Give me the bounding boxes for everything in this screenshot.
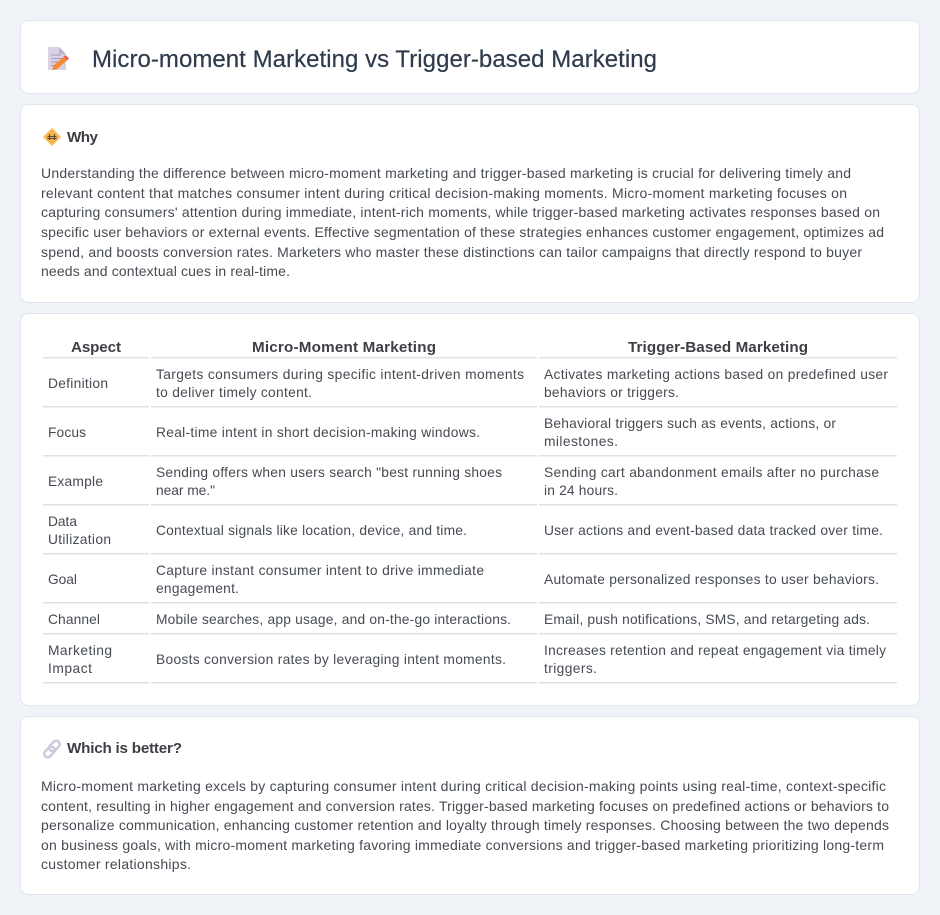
table row: channel	[43, 612, 897, 634]
heading: why: Why	[67, 129, 99, 146]
table row: goal: Goal	[48, 572, 77, 587]
icon: document with pencil	[48, 47, 69, 70]
table row: marketing impact: Marketing	[48, 643, 112, 658]
table row: data utilization: Utilization	[48, 532, 111, 547]
icon: warning diamond	[44, 128, 60, 146]
table header row: Micro-Moment Marketing	[252, 339, 436, 356]
text block: why paragraph: needs and contextual cues in real-time.	[41, 263, 290, 279]
text block: which is better paragraph: customer relationships.	[41, 856, 191, 872]
panel: title header	[20, 20, 920, 94]
table row: example: in 24 hours.	[544, 483, 618, 498]
table row: data utilization	[43, 514, 897, 554]
table row: example: Example	[48, 474, 103, 489]
table row: marketing impact	[43, 643, 897, 684]
table row: goal: Capture instant consumer intent to drive immediate	[156, 563, 484, 578]
table row: definition: Activates marketing actions based on predefined user	[544, 367, 888, 382]
table row: channel: Mobile searches, app usage, and on-the-go interactions.	[156, 612, 511, 627]
table row: definition: Definition	[48, 376, 108, 391]
table row: focus: milestones.	[544, 434, 618, 449]
table header row: Aspect	[71, 339, 121, 356]
text block: which is better paragraph: Micro-moment marketing excels by capturing consumer intent during critical decision-making points using real-time, context-specific	[41, 778, 886, 794]
table row: definition: behaviors or triggers.	[544, 385, 679, 400]
panel: which is better	[20, 716, 920, 894]
text block: which is better paragraph: content, resulting in higher engagement and conversion rates. Trigger-based marketing focuses on predefined actions or behaviors to	[41, 798, 889, 814]
table row: definition	[43, 367, 897, 408]
text block: why paragraph: capturing consumers' attention during immediate, intent-rich moments, while trigger-based marketing activates responses based on	[41, 204, 880, 220]
table header row: Trigger-Based Marketing	[628, 339, 808, 356]
text block: which is better paragraph: personalize communication, enhancing customer retention and loyalty through timely responses. Choosing between the two depends	[41, 817, 889, 833]
table row: example: near me."	[156, 483, 215, 498]
table row: example: Sending cart abandonment emails after no purchase	[544, 465, 879, 480]
panel: why	[20, 104, 920, 302]
icon: chain link	[43, 739, 61, 759]
table row: goal: Automate personalized responses to user behaviors.	[544, 572, 879, 587]
table row: goal	[43, 563, 897, 604]
title: Micro-moment Marketing vs Trigger-based Marketing	[92, 46, 657, 73]
table row: definition: to deliver timely content.	[156, 385, 312, 400]
heading: which is better: Which is better?	[67, 740, 182, 757]
table row: data utilization: Contextual signals like location, device, and time.	[156, 523, 467, 538]
table row: marketing impact: Impact	[48, 661, 92, 676]
text block: why paragraph: Understanding the difference between micro-moment marketing and trigger-based marketing is crucial for delivering timely and	[41, 165, 851, 181]
table row: channel: Channel	[48, 612, 100, 627]
text block: why paragraph: specific user behaviors or external events. Effective segmentation of these strategies enhances customer engagement, optimizes ad	[41, 224, 884, 240]
text block: why paragraph: relevant content that matches consumer intent during critical decision-making moments. Micro-moment marketing focuses on	[41, 185, 847, 201]
table header row	[43, 339, 897, 358]
panel: comparison table	[20, 314, 920, 706]
table row: focus	[43, 416, 897, 456]
table row: focus: Real-time intent in short decision-making windows.	[156, 425, 480, 440]
table row: data utilization: User actions and event-based data tracked over time.	[544, 523, 883, 538]
text block: which is better paragraph: on business goals, with micro-moment marketing favoring immediate conversions and trigger-based marketing prioritizing long-term	[41, 837, 884, 853]
table row: data utilization: Data	[48, 514, 77, 529]
text block: which is better paragraph	[41, 778, 889, 872]
table row: goal: engagement.	[156, 581, 239, 596]
text block: why paragraph	[41, 165, 884, 279]
table row: example	[43, 465, 897, 506]
table row: focus: Behavioral triggers such as events, actions, or	[544, 416, 836, 431]
table row: example: Sending offers when users search "best running shoes	[156, 465, 502, 480]
table row: channel: Email, push notifications, SMS, and retargeting ads.	[544, 612, 870, 627]
table row: marketing impact: triggers.	[544, 661, 597, 676]
table row: marketing impact: Increases retention and repeat engagement via timely	[544, 643, 886, 658]
table row: focus: Focus	[48, 425, 86, 440]
table row: definition: Targets consumers during specific intent-driven moments	[156, 367, 524, 382]
text block: why paragraph: spend, and boosts conversion rates. Marketers who master these distinctions can tailor campaigns that directly respond to buyer	[41, 244, 862, 260]
table row: marketing impact: Boosts conversion rates by leveraging intent moments.	[156, 652, 506, 667]
